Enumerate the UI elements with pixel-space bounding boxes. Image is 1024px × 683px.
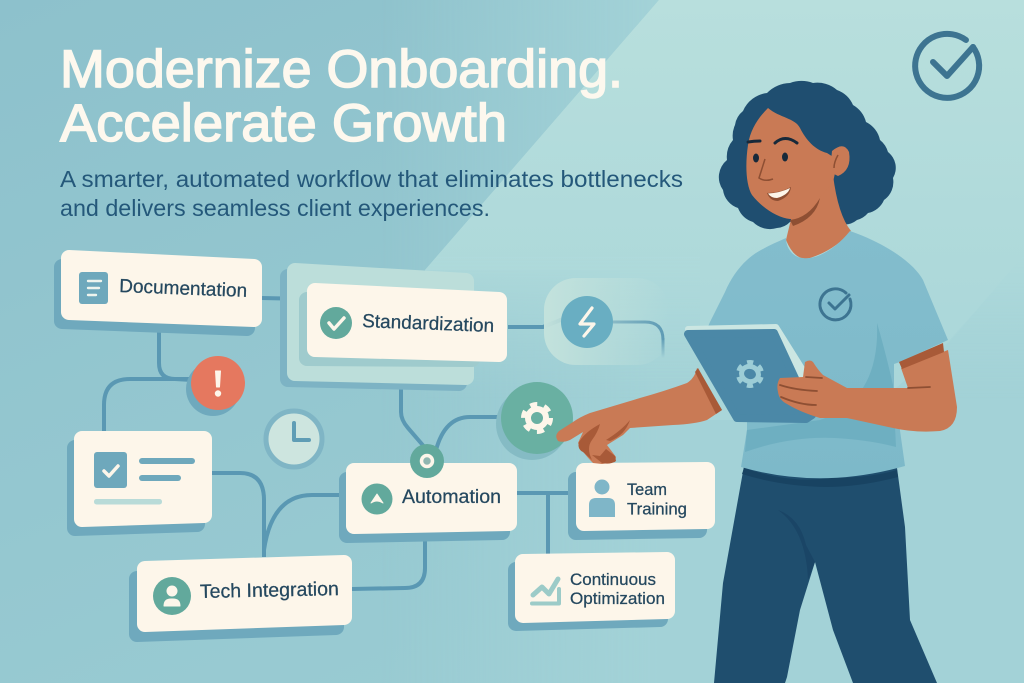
label: continuous optimization: [570, 570, 665, 608]
icon: shirt check logo: [820, 289, 851, 320]
pants: [714, 466, 937, 683]
checklist lines: [94, 458, 195, 504]
title: [60, 40, 623, 153]
icon: gear node: [496, 382, 573, 460]
panel: team training card: [576, 470, 707, 532]
alert badge: [186, 356, 245, 416]
panel: documentation card: [62, 258, 254, 328]
icon: automation: [362, 484, 392, 514]
title: Accelerate Growth: [60, 94, 507, 153]
person: [556, 81, 957, 683]
connector lines: [104, 298, 664, 589]
eyes: [753, 154, 759, 162]
shirt: [700, 231, 948, 478]
label: continuous optimization: Continuous: [570, 570, 656, 589]
label: automation: Automation: [402, 487, 501, 508]
icon: document: [79, 272, 108, 304]
holding arm and hand: [777, 343, 957, 432]
icon: user circle: [153, 577, 191, 615]
panel: automation card: [347, 471, 509, 535]
subtitle: [60, 166, 683, 221]
icon: growth chart: [532, 579, 559, 604]
neck: [786, 175, 851, 259]
panel: continuous optimization card: [516, 560, 667, 623]
background: [423, 0, 1024, 683]
face: [746, 108, 850, 226]
panel: checklist card: [75, 439, 204, 528]
subtitle: and delivers seamless client experiences.: [60, 195, 490, 221]
subtitle: A smarter, automated workflow that eliminates bottlenecks: [60, 166, 683, 192]
label: team training: Team: [627, 481, 667, 499]
panel: tech integration card: [137, 563, 344, 634]
connector node: [410, 444, 444, 478]
panel: standardization backing stack: [288, 271, 472, 383]
label: team training: Training: [627, 500, 687, 518]
title: Modernize Onboarding.: [60, 40, 623, 99]
icon: check box: [94, 452, 127, 488]
hair: [719, 81, 896, 229]
label: tech integration: Tech Integration: [200, 578, 339, 603]
tablet: [688, 327, 812, 419]
icon: lightning node: [544, 278, 669, 365]
icon: person: [589, 480, 615, 517]
label: continuous optimization: Optimization: [570, 589, 665, 608]
icon: clock: [266, 411, 322, 467]
pointing arm and hand: [556, 368, 722, 464]
icon: top right check badge: [915, 34, 979, 98]
label: team training: [627, 481, 687, 518]
icon: green check: [320, 307, 352, 339]
icon: tablet gear: [736, 360, 764, 388]
panel: standardization card: [315, 291, 499, 354]
label: documentation: Documentation: [119, 276, 248, 302]
label: standardization: Standardization: [362, 311, 495, 337]
